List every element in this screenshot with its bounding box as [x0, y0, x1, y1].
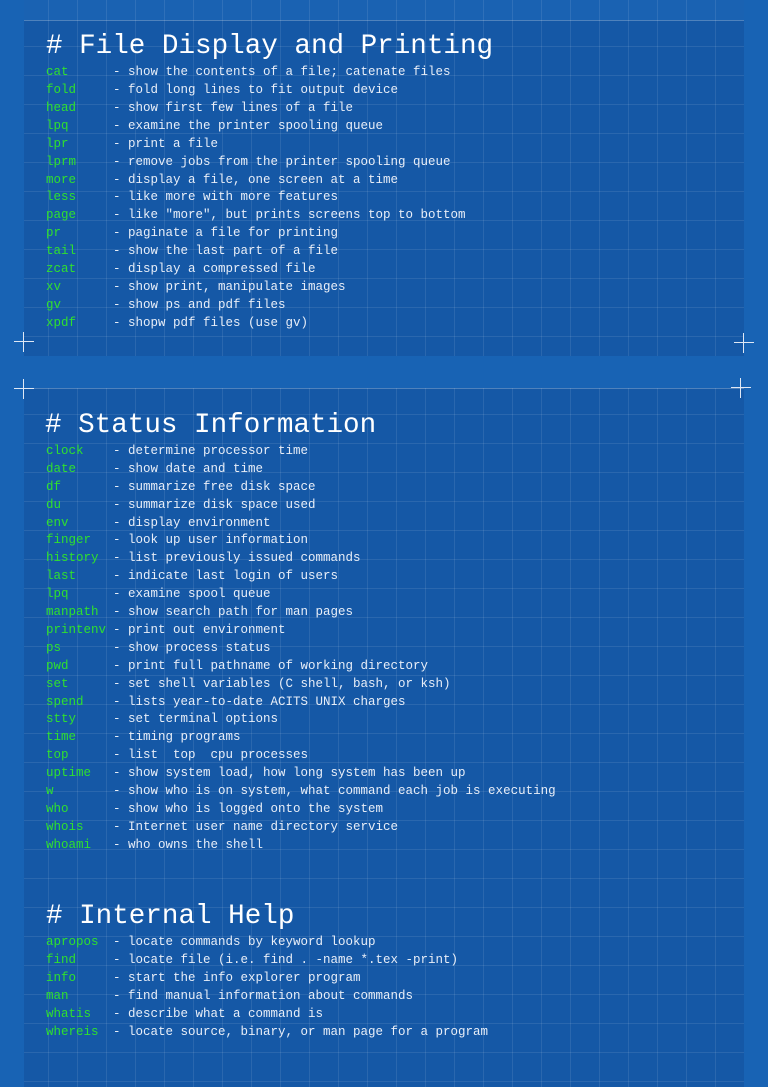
list: internal help commands: apropos — [46, 935, 99, 949]
list: status commands: time — [46, 730, 76, 744]
list: file display commands: - fold long lines to fit output device — [113, 83, 398, 97]
title: internal help: # Internal Help — [46, 901, 294, 932]
list: status commands: - indicate last login of users — [113, 569, 338, 583]
list: status commands: - show who is on system, what command each job is executing — [113, 784, 556, 798]
list: internal help commands: - locate file (i.e. find . -name *.tex -print) — [113, 953, 458, 967]
list: status commands: - show search path for man pages — [113, 605, 353, 619]
list: internal help commands: - describe what a command is — [113, 1007, 323, 1021]
list: file display commands: - remove jobs from the printer spooling queue — [113, 155, 451, 169]
list: file display commands: lprm — [46, 155, 76, 169]
list: file display commands: tail — [46, 244, 76, 258]
list: file display commands: - show ps and pdf files — [113, 298, 286, 312]
list: status commands: - list previously issued commands — [113, 551, 361, 565]
panel: status information and internal help — [24, 388, 744, 1087]
list: status commands: clock — [46, 444, 84, 458]
list: file display commands: - examine the printer spooling queue — [113, 119, 383, 133]
list: status commands: top — [46, 748, 69, 762]
list: status commands: w — [46, 784, 54, 798]
list: file display commands: - like more with more features — [113, 190, 338, 204]
list: status commands: lpq — [46, 587, 69, 601]
list: status commands: printenv — [46, 623, 106, 637]
list: file display commands: cat — [46, 65, 69, 79]
list: status commands: uptime — [46, 766, 91, 780]
list: status commands: df — [46, 480, 61, 494]
list: status commands: - set shell variables (C shell, bash, or ksh) — [113, 677, 451, 691]
list: file display commands: - like "more", but prints screens top to bottom — [113, 208, 466, 222]
list: internal help commands: - start the info explorer program — [113, 971, 361, 985]
list: file display commands: - display a file, one screen at a time — [113, 173, 398, 187]
list: file display commands: lpq — [46, 119, 69, 133]
panel: top strip — [24, 0, 744, 20]
list: status commands: - display environment — [113, 516, 271, 530]
list: file display commands: - shopw pdf files (use gv) — [113, 316, 308, 330]
list: file display commands: page — [46, 208, 76, 222]
list: status commands: - show process status — [113, 641, 271, 655]
list: status commands: - determine processor time — [113, 444, 308, 458]
list: status commands: - who owns the shell — [113, 838, 263, 852]
list: file display commands: - paginate a file for printing — [113, 226, 338, 240]
list: file display commands: xv — [46, 280, 61, 294]
list: status commands: - print out environment — [113, 623, 286, 637]
title: # File Display and Printing — [46, 31, 493, 62]
list: status commands — [46, 444, 556, 852]
list: file display commands: xpdf — [46, 316, 76, 330]
list: status commands: history — [46, 551, 99, 565]
list: internal help commands: man — [46, 989, 69, 1003]
list: file display commands: - show first few lines of a file — [113, 101, 353, 115]
list: status commands: last — [46, 569, 76, 583]
list: file display commands: more — [46, 173, 76, 187]
list: status commands: whois — [46, 820, 84, 834]
list: file display commands: gv — [46, 298, 61, 312]
list: file display commands — [46, 65, 466, 330]
list: file display commands: zcat — [46, 262, 76, 276]
list: file display commands: - show the contents of a file; catenate files — [113, 65, 451, 79]
list: status commands: - show system load, how long system has been up — [113, 766, 466, 780]
list: status commands: - show who is logged onto the system — [113, 802, 383, 816]
list: status commands: stty — [46, 712, 76, 726]
list: status commands: set — [46, 677, 69, 691]
list: status commands: finger — [46, 533, 91, 547]
list: internal help commands: - locate source, binary, or man page for a program — [113, 1025, 488, 1039]
list: file display commands: less — [46, 190, 76, 204]
panel: file display and printing — [24, 20, 744, 356]
list: internal help commands: whereis — [46, 1025, 99, 1039]
list: status commands: who — [46, 802, 69, 816]
list: status commands: - show date and time — [113, 462, 263, 476]
list: status commands: - print full pathname of working directory — [113, 659, 428, 673]
list: file display commands: - show the last part of a file — [113, 244, 338, 258]
list: status commands: spend — [46, 695, 84, 709]
list: file display commands: pr — [46, 226, 61, 240]
list: internal help commands: - locate commands by keyword lookup — [113, 935, 376, 949]
list: status commands: - summarize free disk space — [113, 480, 316, 494]
list: status commands: - summarize disk space used — [113, 498, 316, 512]
list: file display commands: head — [46, 101, 76, 115]
list: status commands: - lists year-to-date ACITS UNIX charges — [113, 695, 406, 709]
list: file display commands: lpr — [46, 137, 69, 151]
list: file display commands: - show print, manipulate images — [113, 280, 346, 294]
list: status commands: pwd — [46, 659, 69, 673]
list: internal help commands: find — [46, 953, 76, 967]
list: status commands: - list top cpu processes — [113, 748, 308, 762]
list: internal help commands: whatis — [46, 1007, 91, 1021]
list: status commands: whoami — [46, 838, 91, 852]
list: internal help commands: info — [46, 971, 76, 985]
list: status commands: - Internet user name directory service — [113, 820, 398, 834]
list: status commands: - set terminal options — [113, 712, 278, 726]
crosshairs — [14, 332, 754, 399]
list: status commands: - timing programs — [113, 730, 241, 744]
list: file display commands: - display a compressed file — [113, 262, 316, 276]
list: status commands: du — [46, 498, 61, 512]
title: # Status Information — [45, 410, 376, 441]
list: status commands: - look up user information — [113, 533, 308, 547]
list: status commands: env — [46, 516, 69, 530]
list: internal help commands — [46, 935, 488, 1039]
list: status commands: - examine spool queue — [113, 587, 271, 601]
list: file display commands: fold — [46, 83, 76, 97]
list: status commands: ps — [46, 641, 61, 655]
list: status commands: date — [46, 462, 76, 476]
list: file display commands: - print a file — [113, 137, 218, 151]
list: status commands: manpath — [46, 605, 99, 619]
list: internal help commands: - find manual information about commands — [113, 989, 413, 1003]
